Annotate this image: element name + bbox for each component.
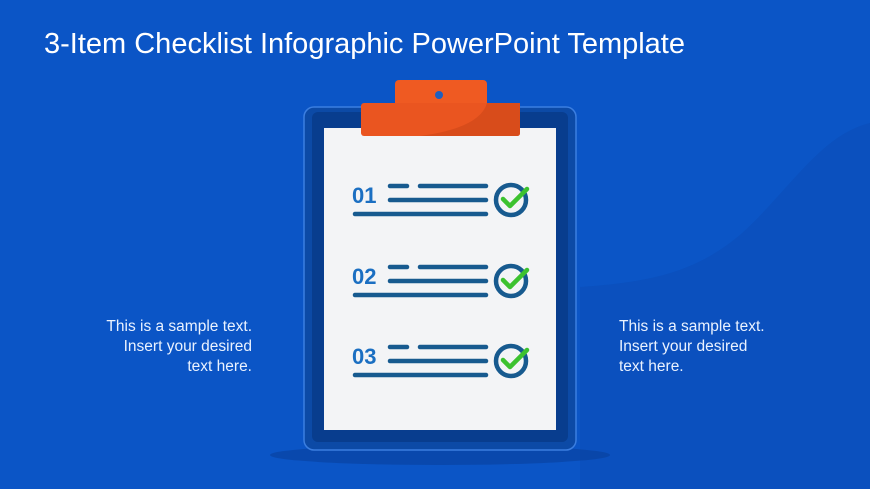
paper	[324, 128, 556, 430]
right text: This is a sample text.	[619, 318, 765, 335]
right text: text here.	[619, 358, 684, 375]
right text: Insert your desired	[619, 338, 747, 355]
item 01: 01	[352, 183, 376, 208]
item 02	[352, 264, 527, 296]
item 02: 02	[352, 264, 376, 289]
right text	[619, 318, 765, 375]
item 03: 03	[352, 344, 376, 369]
item 03	[352, 344, 527, 376]
clip	[361, 80, 520, 136]
left text	[106, 318, 252, 375]
title: 3-Item Checklist Infographic PowerPoint Template	[44, 28, 685, 60]
checklist rows	[352, 183, 527, 376]
board	[304, 107, 576, 450]
left text: Insert your desired	[124, 338, 252, 355]
left text: text here.	[187, 358, 252, 375]
left text: This is a sample text.	[106, 318, 252, 335]
item 01	[352, 183, 527, 215]
